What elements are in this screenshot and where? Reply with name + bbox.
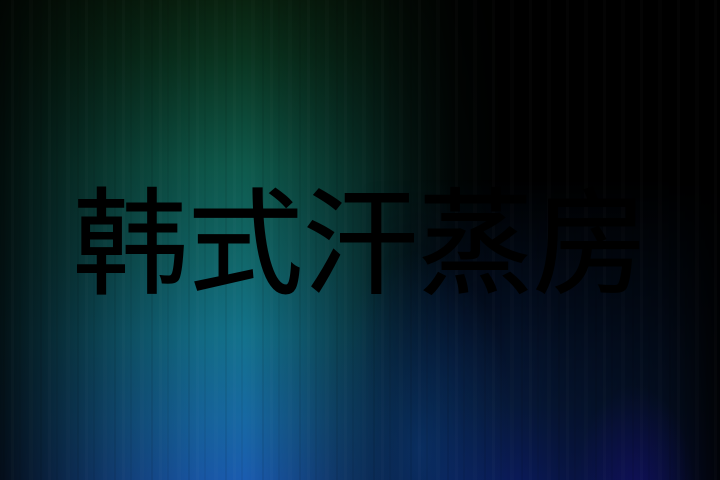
title: 韩式汗蒸房 [73, 181, 648, 309]
